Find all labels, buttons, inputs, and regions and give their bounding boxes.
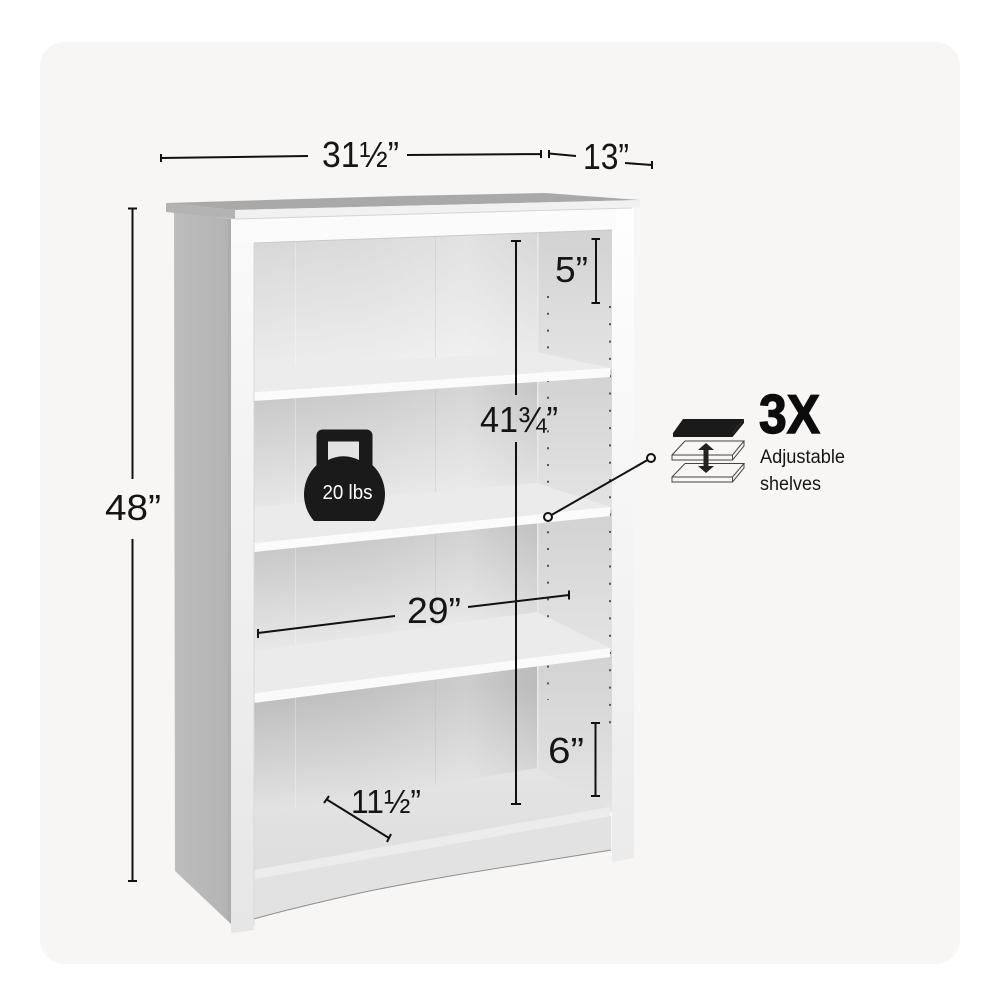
dimension: height 48: 48” [105,487,161,528]
bookcase illustration [166,193,640,933]
text: adjustable shelves: shelves [760,474,821,495]
icon: 20 lbs kettlebell [304,430,385,521]
text: adjustable shelves: Adjustable [760,447,845,468]
front frame [231,208,634,933]
dimension: depth 13 [549,136,652,177]
dimension: top clearance 5 [555,239,600,303]
shelf 1 [254,352,610,401]
dimension: height 48 [105,208,161,881]
dimension: top clearance 5: 5” [555,249,588,290]
dimension: shelf depth 11 1/2: 11½” [351,783,421,820]
shelf 2 [254,483,610,552]
icon: stacked adjustable shelves [672,419,744,482]
dimension: interior height 41 3/4: 41¾” [480,399,558,440]
dimension: width 31 1/2: 31½” [322,134,399,175]
top board [166,193,640,219]
text: adjustable shelves [760,447,845,495]
right inner wall [537,228,612,818]
icon: 20 lbs kettlebell: 20 lbs [322,482,372,504]
callout leader: adjustable shelf pointer [544,454,655,521]
bottom shelf and base [254,768,611,919]
dimension: shelf depth 11 1/2 [324,783,421,842]
dimension: interior width 29 [258,590,569,638]
dimension: depth 13: 13” [583,136,629,177]
dimension: interior width 29: 29” [407,590,461,631]
back wall [254,230,538,830]
left side panel [174,212,232,925]
heading: 3X: 3X [759,383,820,445]
dimension: bottom clearance 6 [548,723,600,796]
dimension: interior height 41 3/4 [480,241,558,804]
shelf 3 [254,612,610,703]
dimension: bottom clearance 6: 6” [548,730,584,771]
dimension: width 31 1/2 [161,134,541,175]
